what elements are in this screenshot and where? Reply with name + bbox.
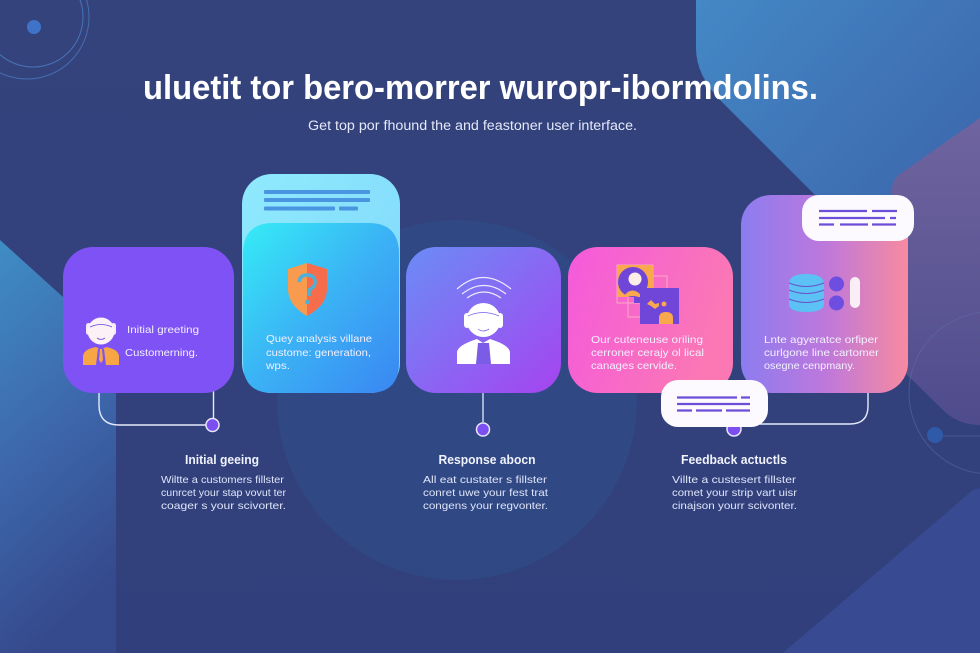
- panel: data aggregation: [741, 195, 908, 393]
- panel: customer service: [568, 247, 733, 393]
- note lines: [264, 190, 370, 210]
- label: initial greeting: Initial greeting: [127, 324, 199, 336]
- caption: feedback: Feedback actuctls: [681, 453, 787, 467]
- label: customerning: Customerning.: [125, 347, 198, 359]
- icon: agent with signal: [457, 278, 511, 364]
- node: step 5: [727, 422, 741, 436]
- panel: customer service: cerroner cerajy ol lical: [591, 347, 704, 359]
- connector: step 1: [99, 390, 214, 425]
- caption: response: conret uwe your fest trat: [423, 487, 548, 499]
- panel: response: [406, 247, 561, 393]
- text: data aggregation: Lnte agyeratce orfiper: [764, 334, 879, 346]
- front card: [243, 223, 399, 393]
- panel: customer service: canages cervide.: [591, 360, 677, 372]
- caption: initial: Initial geeing: [185, 453, 259, 467]
- text: customer service: Our cuteneuse oriling: [591, 334, 703, 346]
- caption: feedback: [672, 453, 798, 512]
- caption: initial: Wiltte a customers fillster: [161, 474, 285, 486]
- callout: top right: [802, 195, 914, 241]
- callout: bottom: [661, 380, 768, 427]
- panel: data aggregation: osegne cenpmany.: [764, 360, 855, 372]
- node: step 1: [206, 418, 219, 432]
- icon: shield question: [288, 263, 327, 316]
- node: step 3: [476, 423, 490, 436]
- caption: feedback: Villte a custesert fillster: [672, 474, 797, 486]
- caption: initial: [161, 453, 286, 512]
- caption: response: congens your regvonter.: [423, 500, 548, 512]
- icon: agent: [83, 318, 119, 365]
- text: query analysis: Quey analysis villane: [266, 333, 372, 345]
- icon: database and dots: [789, 274, 860, 312]
- icon: profile cards: [617, 265, 679, 324]
- panel: data aggregation: curlgone line cartomer: [764, 347, 880, 359]
- caption: initial: coager s your scivorter.: [161, 500, 286, 512]
- caption: feedback: cinajson yourr scivonter.: [672, 500, 797, 512]
- caption: response: [423, 453, 548, 512]
- caption: response: Response abocn: [438, 453, 536, 467]
- panel: query analysis: custome: generation,: [266, 347, 371, 359]
- subtitle: Get top por fhound the and feastoner user interface.: [308, 118, 637, 133]
- connector: step 5: [740, 390, 868, 424]
- caption: response: All eat custater s fillster: [423, 474, 548, 486]
- panel: query analysis: [242, 174, 400, 393]
- panel: query analysis: wps.: [265, 360, 290, 372]
- connector: step 3: [482, 390, 484, 422]
- title: uluetit tor bero-morrer wuropr-ibormdolins.: [143, 69, 818, 107]
- caption: initial: cunrcet your stap vovut ter: [161, 487, 286, 499]
- panel: initial greeting: [63, 247, 234, 393]
- caption: feedback: comet your strip vart uisr: [672, 487, 798, 499]
